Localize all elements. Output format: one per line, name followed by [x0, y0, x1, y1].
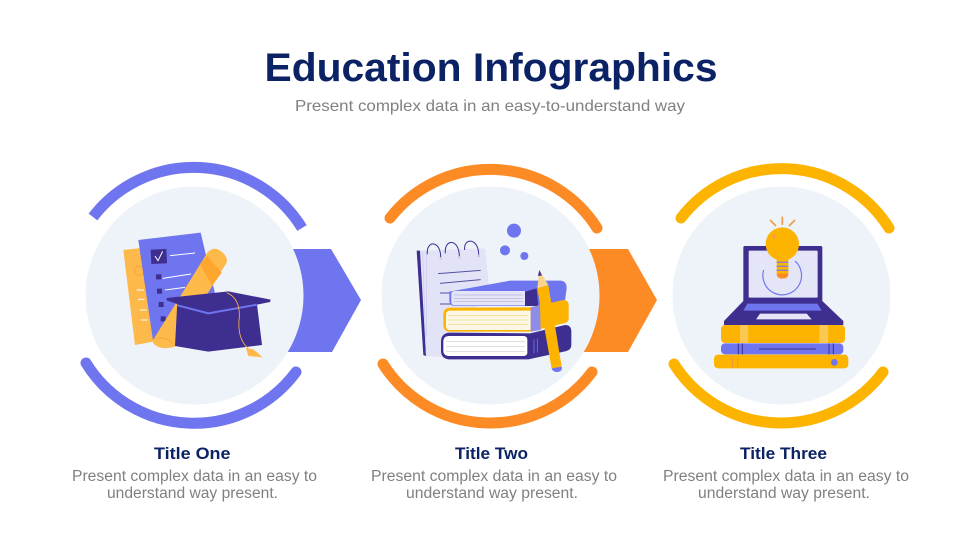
description two: Present complex data in an easy to	[371, 468, 617, 485]
background circle one	[86, 186, 304, 404]
description one	[72, 468, 317, 502]
subtitle: Present complex data in an easy-to-understand way	[295, 98, 685, 115]
background circle three	[672, 186, 890, 404]
description one: understand way present.	[107, 485, 278, 502]
description three: Present complex data in an easy to	[663, 468, 909, 485]
top arc three	[681, 169, 889, 228]
top arc two	[390, 169, 597, 228]
description three: understand way present.	[698, 485, 870, 502]
background circle two	[382, 186, 600, 404]
top arc one	[93, 167, 302, 228]
heading: title one: Title One	[154, 444, 230, 463]
panel: step three	[663, 169, 909, 502]
panel: step two	[371, 169, 657, 502]
description two	[371, 468, 617, 502]
title: Education Infographics	[264, 46, 718, 90]
description three	[663, 468, 909, 502]
bottom arc one	[86, 363, 296, 423]
arrow: step two to step three	[575, 249, 657, 352]
bottom arc three	[674, 364, 883, 423]
description one: Present complex data in an easy to	[72, 468, 317, 485]
heading: title three: Title Three	[740, 444, 827, 463]
icon: checklist, diploma and graduation cap	[123, 233, 271, 357]
arrow: step one to step two	[280, 249, 361, 352]
icon: notepad, stacked books and pencil	[417, 224, 571, 372]
icon: lightbulb, laptop and books	[714, 217, 848, 368]
bottom arc two	[383, 364, 592, 423]
heading: title two: Title Two	[455, 444, 528, 463]
description two: understand way present.	[406, 485, 578, 502]
panel: step one	[72, 167, 361, 502]
